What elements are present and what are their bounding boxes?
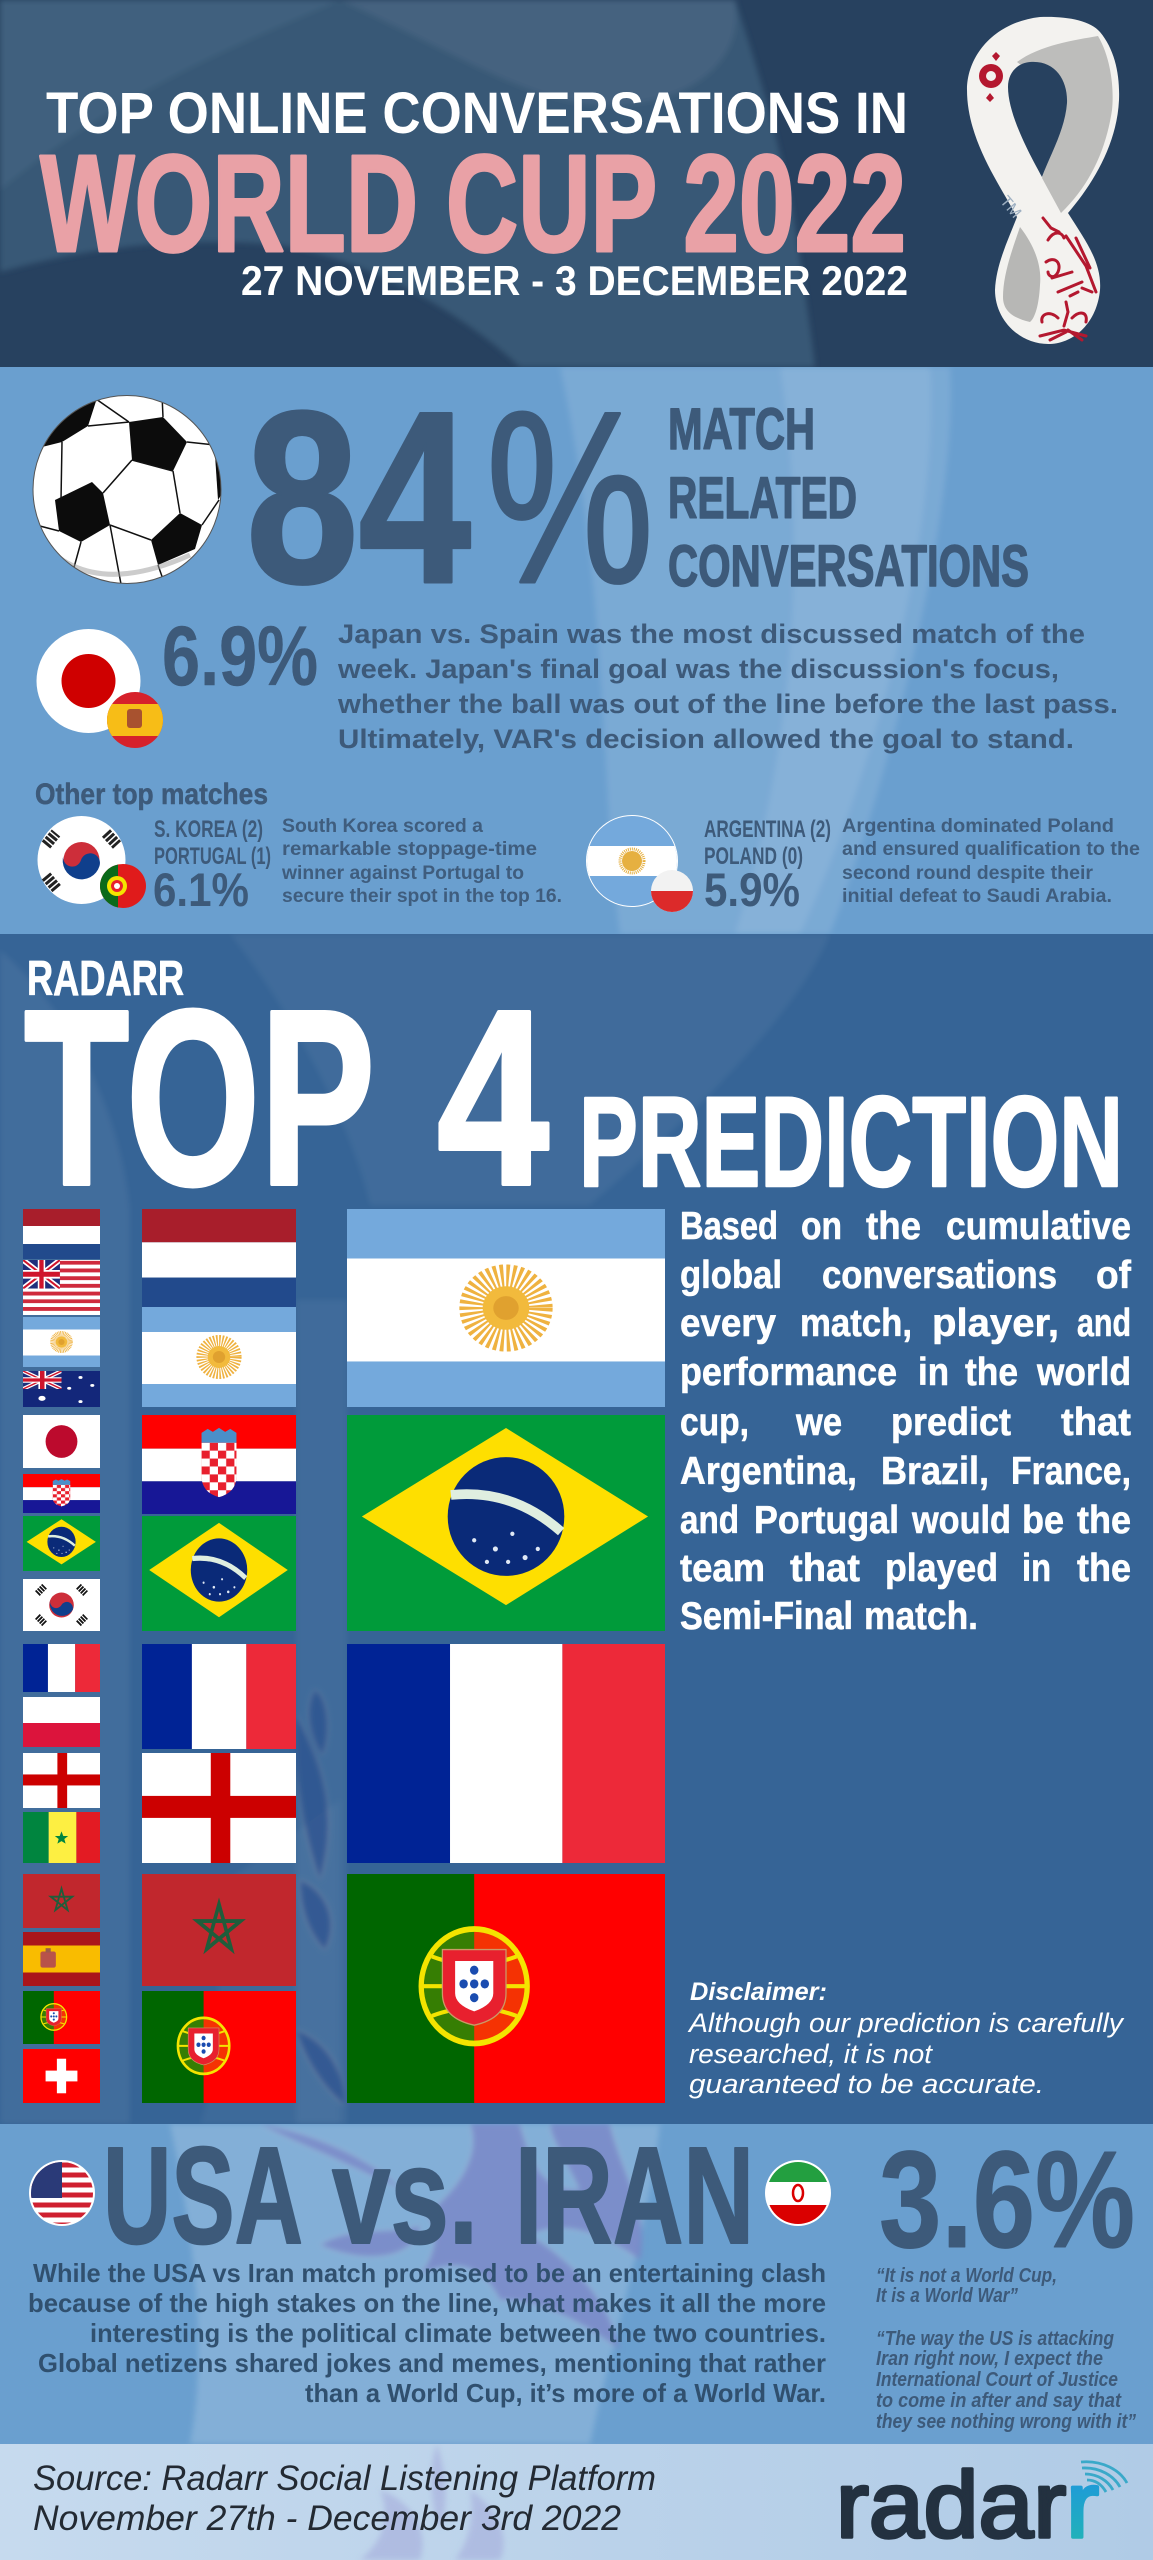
flags: quarter final column [142, 1209, 296, 2103]
score: argentina vs poland: ARGENTINA (2) [704, 816, 831, 843]
paragraph: prediction rationale: Brazil, [881, 1450, 989, 1493]
paragraph: prediction rationale: player, [932, 1302, 1059, 1345]
score: argentina vs poland: POLAND (0) [704, 843, 803, 870]
paragraph: south korea: winner against Portugal to [281, 863, 524, 884]
paragraph: prediction rationale: every [680, 1302, 776, 1345]
source text [33, 2459, 656, 2538]
paragraph: japan vs spain: Japan vs. Spain was the most discussed match of the [338, 619, 1085, 649]
paragraph: prediction rationale: global [680, 1254, 782, 1297]
panel: footer [0, 2444, 1153, 2560]
paragraph: prediction rationale: match, [800, 1302, 912, 1345]
paragraph: argentina: and ensured qualification to the [842, 839, 1140, 860]
heading: usa vs iran: IRAN [515, 2119, 754, 2273]
score: argentina vs poland: 5.9% [704, 863, 800, 916]
paragraph: prediction rationale: conversations [822, 1254, 1057, 1297]
heading: usa vs iran: vs. [332, 2119, 478, 2273]
paragraph: prediction rationale: match. [864, 1595, 978, 1638]
paragraph: usa vs iran: interesting is the political climate between the two countries. [90, 2318, 826, 2348]
panel: top 4 prediction [0, 934, 1153, 2124]
panel: usa vs iran [0, 2119, 1153, 2444]
quotes: “It is not a World Cup, [876, 2265, 1057, 2287]
paragraph: prediction rationale: that [790, 1547, 860, 1590]
paragraph: prediction rationale: team [680, 1547, 765, 1590]
label: match related conversations: RELATED [668, 466, 857, 531]
paragraph: usa vs iran [28, 2258, 826, 2408]
logo: radarr: radarr [836, 2452, 1099, 2557]
paragraph: japan vs spain [337, 619, 1118, 754]
label: match related conversations: MATCH [668, 397, 815, 462]
score: south korea vs portugal: PORTUGAL (1) [154, 843, 271, 870]
paragraph: prediction rationale: be [1022, 1499, 1064, 1542]
label: match related conversations [668, 397, 1029, 599]
paragraph: prediction rationale: France, [1011, 1450, 1131, 1493]
icon: iran flag [765, 2160, 831, 2227]
icon: argentina and poland flags [586, 815, 694, 912]
paragraph: prediction rationale: Argentina, [680, 1450, 857, 1493]
disclaimer: Disclaimer: [690, 1978, 827, 2006]
panel: header [0, 0, 1153, 367]
icon: usa flag [29, 2160, 95, 2226]
paragraph: prediction rationale: the [1077, 1547, 1131, 1590]
score: south korea vs portugal [153, 816, 271, 916]
paragraph: south korea: remarkable stoppage-time [282, 839, 537, 860]
heading: usa vs iran [103, 2119, 754, 2273]
paragraph: prediction rationale: we [795, 1401, 842, 1444]
disclaimer: guaranteed to be accurate. [689, 2069, 1044, 2099]
icon: soccer ball [30, 395, 225, 590]
paragraph: prediction rationale: Semi-Final [680, 1595, 853, 1638]
paragraph: argentina: second round despite their [842, 863, 1094, 884]
paragraph: south korea [281, 816, 562, 907]
icon: south korea and portugal flags [38, 816, 146, 908]
paragraph: prediction rationale: that [1061, 1401, 1131, 1444]
disclaimer: researched, it is not [689, 2039, 934, 2069]
disclaimer: Although our prediction is carefully [687, 2008, 1125, 2038]
paragraph: prediction rationale: in [1022, 1547, 1051, 1590]
paragraph: usa vs iran: While the USA vs Iran match promised to be an entertaining clash [33, 2258, 826, 2288]
paragraph: prediction rationale: and [1077, 1302, 1131, 1345]
paragraph: argentina: Argentina dominated Poland [842, 816, 1114, 837]
paragraph: prediction rationale: the [1077, 1499, 1131, 1542]
paragraph: prediction rationale: and [680, 1499, 739, 1542]
paragraph: usa vs iran: because of the high stakes on the line, what makes it all the more [28, 2288, 826, 2318]
paragraph: prediction rationale: cumulative [946, 1205, 1131, 1248]
quotes: It is a World War” [876, 2285, 1018, 2307]
quotes: Iran right now, I expect the [876, 2348, 1103, 2370]
heading: other top matches: Other top matches [35, 778, 268, 811]
quotes: to come in after and say that [876, 2390, 1122, 2412]
big stat 84%: 84 [246, 360, 471, 634]
flags: semi final column [347, 1209, 665, 2103]
big stat 84% [246, 360, 654, 634]
paragraph: japan vs spain: week. Japan's final goal was the discussion's focus, [337, 654, 1059, 684]
heading: 4: 4 [437, 958, 549, 1237]
quotes [876, 2265, 1136, 2433]
icon: japan and spain flags [36, 629, 165, 750]
paragraph: prediction rationale: of [1096, 1254, 1132, 1297]
paragraph: prediction rationale: Based [680, 1205, 778, 1248]
date range: 27 NOVEMBER - 3 DECEMBER 2022 [241, 257, 908, 304]
paragraph: prediction rationale: performance [680, 1351, 897, 1394]
flags: round of 16 column [23, 1209, 100, 2103]
paragraph: japan vs spain: whether the ball was out of the line before the last pass. [337, 689, 1118, 719]
paragraph: south korea: South Korea scored a [282, 816, 483, 837]
title line 1: TOP ONLINE CONVERSATIONS IN [46, 81, 908, 146]
panel: match related conversations [0, 360, 1153, 934]
stat 6.9%: 6.9% [162, 609, 318, 703]
paragraph: prediction rationale: in [918, 1351, 949, 1394]
emblem trademark: TM [996, 193, 1024, 222]
paragraph: usa vs iran: Global netizens shared jokes and memes, mentioning that rather [38, 2348, 826, 2378]
heading: top: TOP [24, 958, 375, 1237]
score: south korea vs portugal: S. KOREA (2) [154, 816, 263, 843]
paragraph: argentina [842, 816, 1140, 907]
paragraph: prediction rationale [680, 1205, 1132, 1638]
icon: world cup emblem [967, 17, 1119, 344]
quotes: “The way the US is attacking [876, 2328, 1114, 2350]
paragraph: prediction rationale: cup, [680, 1401, 749, 1444]
disclaimer [687, 1978, 1125, 2099]
paragraph: japan vs spain: Ultimately, VAR's decision allowed the goal to stand. [338, 724, 1074, 754]
source text: November 27th - December 3rd 2022 [33, 2499, 621, 2538]
paragraph: prediction rationale: played [885, 1547, 998, 1590]
paragraph: prediction rationale: predict [891, 1401, 1011, 1444]
paragraph: prediction rationale: would [911, 1499, 1011, 1542]
paragraph: usa vs iran: than a World Cup, it’s more of a World War. [305, 2378, 826, 2408]
source text: Source: Radarr Social Listening Platform [33, 2459, 656, 2498]
paragraph: prediction rationale: on [801, 1205, 842, 1248]
paragraph: argentina: initial defeat to Saudi Arabia. [842, 886, 1112, 907]
paragraph: prediction rationale: the [866, 1205, 921, 1248]
score: argentina vs poland [704, 816, 831, 916]
paragraph: prediction rationale: world [1036, 1351, 1131, 1394]
big stat 84%: % [486, 360, 654, 634]
quotes: International Court of Justice [876, 2369, 1118, 2391]
score: south korea vs portugal: 6.1% [153, 863, 249, 916]
heading: radarr: RADARR [27, 952, 184, 1006]
paragraph: south korea: secure their spot in the top 16. [282, 886, 562, 907]
heading: usa vs iran: USA [103, 2119, 303, 2273]
paragraph: prediction rationale: Portugal [754, 1499, 899, 1542]
paragraph: prediction rationale: the [965, 1351, 1018, 1394]
